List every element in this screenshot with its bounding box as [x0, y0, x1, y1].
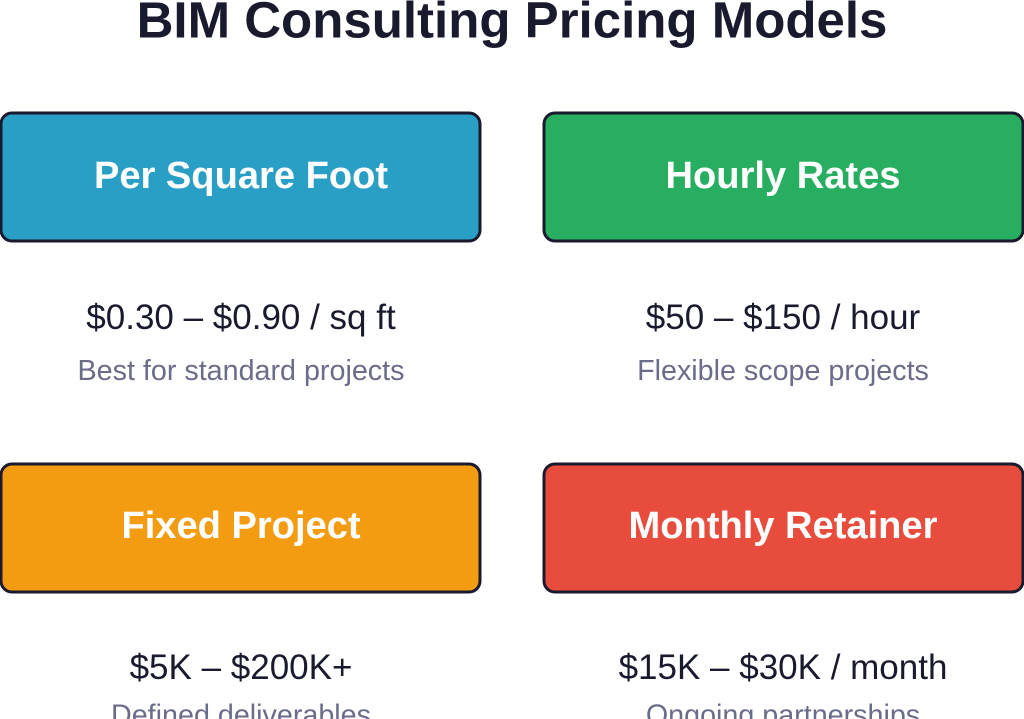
heading: monthly retainer: Monthly Retainer — [629, 505, 938, 547]
price: monthly retainer: $15K – $30K / month — [619, 648, 947, 687]
panel: hourly rates — [544, 113, 1023, 387]
heading: fixed project: Fixed Project — [121, 505, 361, 547]
heading: hourly rates: Hourly Rates — [666, 155, 900, 197]
heading: per square foot: Per Square Foot — [94, 155, 388, 197]
price: fixed project: $5K – $200K+ — [130, 648, 352, 687]
card: hourly rates — [544, 113, 1023, 241]
price: per square foot: $0.30 – $0.90 / sq ft — [86, 298, 396, 337]
card: per square foot — [1, 113, 480, 241]
price: hourly rates: $50 – $150 / hour — [646, 298, 921, 337]
panel: fixed project — [1, 464, 480, 719]
card: fixed project — [1, 464, 480, 592]
panel: monthly retainer — [544, 464, 1023, 719]
note: hourly rates: Flexible scope projects — [637, 355, 929, 387]
panel: per square foot — [1, 113, 480, 387]
note: per square foot: Best for standard projects — [78, 355, 404, 387]
card: monthly retainer — [544, 464, 1023, 592]
